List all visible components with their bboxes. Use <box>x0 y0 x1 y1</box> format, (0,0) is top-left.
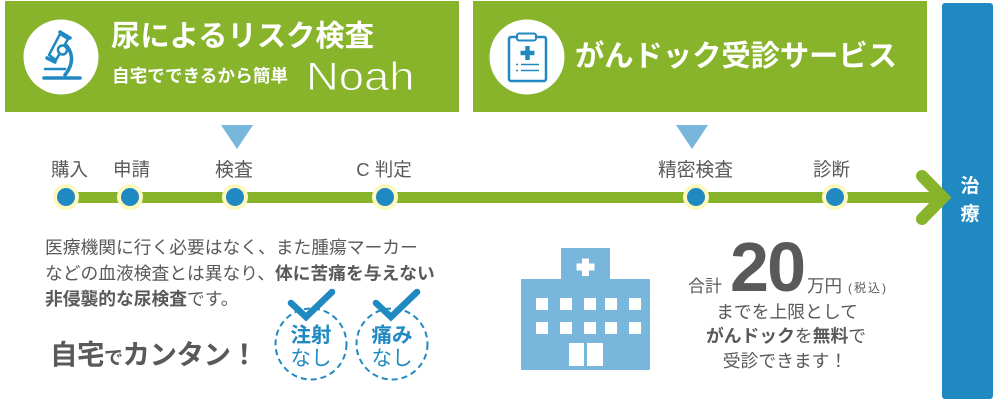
text block: price: までを上限として <box>716 302 858 322</box>
badge: no injection <box>276 292 346 380</box>
step: test: 検査 <box>215 159 253 181</box>
text block: description: です。 <box>187 289 238 309</box>
label: treatment: 治 <box>960 175 980 197</box>
text block: price: 合計 <box>688 277 722 296</box>
timeline arrow <box>66 176 943 219</box>
step: detailed exam: 精密検査 <box>658 159 733 180</box>
heading: cancer dock service: がんドック受診サービス <box>575 39 897 73</box>
icon: clipboard <box>490 20 564 94</box>
heading: urine risk test: 尿によるリスク検査 <box>111 20 374 53</box>
panel: cancer dock service <box>473 1 927 112</box>
badge: no injection: なし <box>290 347 332 370</box>
step: diagnosis <box>813 159 850 210</box>
text block: description: などの血液検査とは異なり、 <box>45 264 275 284</box>
marker: triangle to test step <box>221 125 253 149</box>
step: detailed exam <box>658 159 733 210</box>
step: application: 申請 <box>113 159 150 180</box>
badge: no pain: 痛み <box>372 324 412 347</box>
badge: no injection: 注射 <box>290 324 332 347</box>
text block: price: (税込) <box>848 281 886 295</box>
panel: treatment <box>942 3 993 399</box>
step: test <box>215 159 253 210</box>
panel: urine risk test <box>5 1 459 112</box>
icon: hospital <box>521 248 650 370</box>
step: purchase <box>51 159 88 210</box>
step: C judgement: C 判定 <box>356 159 412 180</box>
subheading: easy at home: 自宅でできるから簡単 <box>112 66 288 86</box>
icon: microscope <box>24 20 98 94</box>
text block: description: 体に苦痛を与えない <box>275 264 435 284</box>
marker: triangle to detailed exam step <box>676 125 708 149</box>
text block: price: 20 <box>730 228 806 306</box>
badge: no pain: なし <box>372 347 412 370</box>
text block: description: 非侵襲的な尿検査 <box>45 289 187 309</box>
text block: price <box>688 228 886 371</box>
step: application <box>113 159 150 210</box>
text block: price: 万円 <box>807 276 842 296</box>
step: diagnosis: 診断 <box>813 159 850 180</box>
text block: price: がんドックを無料で <box>706 325 866 346</box>
text block: price: 受診できます！ <box>723 351 847 371</box>
brand name: Noah: Noah <box>306 55 415 99</box>
text block: description: 医療機関に行く必要はなく、また腫瘍マーカー <box>45 238 418 258</box>
timeline steps <box>51 159 850 210</box>
step: C judgement <box>356 159 412 210</box>
callout: easy at home: 自宅でカンタン！ <box>50 339 258 370</box>
badge: no pain <box>356 292 428 380</box>
label: treatment: 療 <box>960 203 980 225</box>
step: purchase: 購入 <box>51 159 88 180</box>
